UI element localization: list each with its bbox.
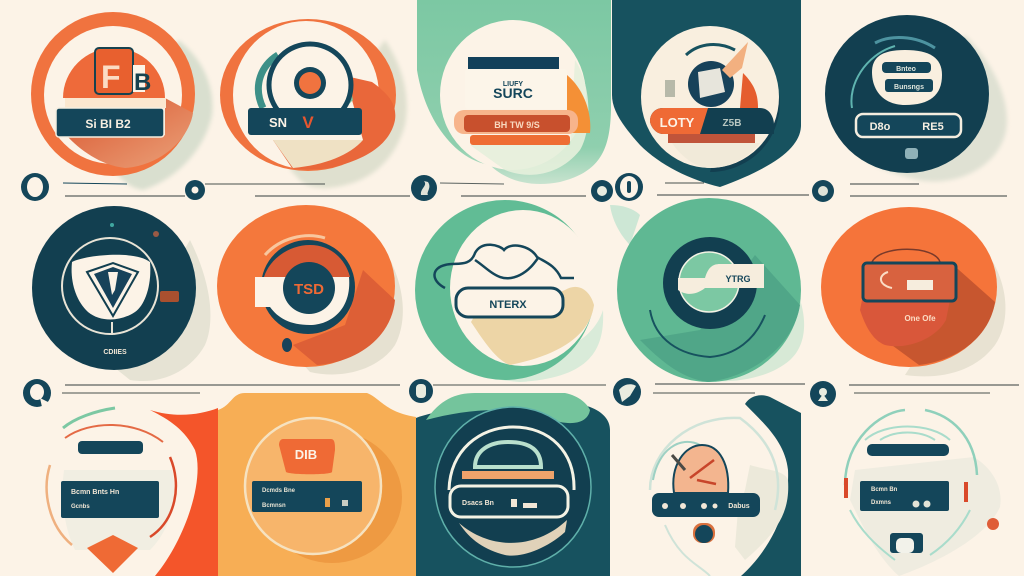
badge 12: amber with glass ring bbox=[245, 418, 402, 563]
icon: cream dome with pills bbox=[872, 50, 942, 105]
label bar: LOTY bbox=[660, 115, 695, 130]
label bar bbox=[454, 110, 578, 145]
node 1 bbox=[21, 173, 49, 201]
badge 13: navy appliance bbox=[435, 407, 591, 567]
label bar: Gcnbs bbox=[71, 504, 90, 510]
label bar: Si BI B2 bbox=[85, 117, 131, 131]
icon: shield bbox=[72, 255, 150, 335]
node 3 bbox=[411, 175, 437, 201]
label bar: RE5 bbox=[922, 121, 944, 133]
icon: cloud outline bbox=[434, 245, 574, 288]
icon: cream dome with pills: Bnteo bbox=[896, 66, 916, 73]
node 6 bbox=[812, 180, 834, 202]
label pill: YTRG bbox=[725, 274, 751, 284]
panel: bottom red backdrop bbox=[150, 408, 218, 576]
top pill bbox=[867, 444, 949, 456]
timeline 2 bbox=[23, 378, 1019, 407]
icon: small device bbox=[905, 148, 918, 159]
panel: bottom amber backdrop bbox=[218, 393, 416, 576]
panel: top green backdrop bbox=[417, 0, 611, 184]
label pill bbox=[456, 288, 563, 317]
badge 10: orange disc with card bbox=[821, 207, 1005, 376]
label bar: Z5B bbox=[723, 118, 741, 129]
badge 6: navy shield bbox=[32, 206, 210, 381]
icon: red tag bbox=[160, 291, 179, 302]
icon: dial bbox=[672, 445, 728, 493]
label pill bbox=[678, 264, 764, 294]
label bar: Dcmds Bne bbox=[262, 488, 296, 494]
small navy blob bbox=[282, 338, 292, 352]
node 2 bbox=[409, 379, 433, 403]
badge 2: orange ring with lens bbox=[220, 19, 407, 188]
icon: box with label: LIUFY bbox=[503, 81, 523, 88]
panel: bottom right navy backdrop bbox=[741, 395, 801, 576]
label bar bbox=[252, 481, 362, 512]
icon: box with label bbox=[465, 57, 590, 133]
label bar: Bcmn Bnts Hn bbox=[71, 489, 119, 496]
label bar bbox=[450, 486, 568, 517]
badge 4: cream circle on navy bbox=[641, 26, 780, 172]
label bar: Bcmnsn bbox=[262, 503, 286, 509]
label bar: V bbox=[302, 113, 314, 132]
icon: gem bbox=[87, 535, 138, 573]
icon: cream dome with pills: Bunsngs bbox=[894, 84, 924, 91]
badge 9: green disc with navy ring bbox=[610, 198, 804, 382]
label bar bbox=[860, 481, 949, 511]
orange tag bbox=[279, 439, 335, 474]
icon: small device bbox=[890, 533, 923, 553]
icon: ring and tag bbox=[255, 236, 355, 334]
badge 1: orange ring with card bbox=[31, 12, 213, 190]
label bar bbox=[61, 481, 159, 518]
badge 5: navy circle bbox=[825, 15, 1007, 181]
label bar: Dabus bbox=[728, 503, 750, 510]
label bar: SN bbox=[269, 115, 287, 130]
top pill bbox=[78, 441, 143, 454]
label bar: Bcmn Bn bbox=[871, 487, 898, 493]
icon: card symbol: F bbox=[101, 59, 121, 95]
icon: red dot bbox=[987, 518, 999, 530]
icon: box with label: SURC bbox=[493, 85, 533, 101]
orange tag: DIB bbox=[295, 447, 317, 462]
panel: bottom green accent bbox=[426, 393, 590, 423]
label pill: NTERX bbox=[489, 299, 527, 311]
label bar bbox=[56, 108, 164, 137]
icon: card bbox=[863, 263, 956, 301]
label bar: Dsacs Bn bbox=[462, 500, 494, 507]
caption: CDIIES bbox=[103, 349, 127, 356]
panel: bottom navy backdrop bbox=[416, 402, 610, 576]
icon: camera bbox=[693, 523, 715, 543]
badge 8: green ring with cream shape bbox=[415, 200, 603, 382]
panel: top navy backdrop bbox=[612, 0, 801, 187]
node 3 bbox=[613, 378, 641, 406]
badge 3: cream circle on green bbox=[440, 20, 590, 175]
node 4 bbox=[810, 381, 836, 407]
label bar bbox=[856, 114, 961, 137]
icon: card symbol: B bbox=[134, 69, 151, 96]
badge 7: orange lens bbox=[217, 205, 403, 374]
icon: globe and rocket bbox=[665, 42, 758, 108]
icon: lens bbox=[258, 44, 353, 126]
node 5 bbox=[615, 173, 643, 201]
label bar bbox=[248, 108, 362, 135]
label bar bbox=[652, 493, 760, 517]
label bar: BH TW 9/S bbox=[494, 120, 540, 130]
label bar: Dxmns bbox=[871, 500, 892, 506]
timeline 1 bbox=[21, 173, 1007, 202]
badge 11: cream with red gem bbox=[47, 408, 176, 573]
label bar: D8o bbox=[870, 121, 891, 133]
badge 14: dial and label bbox=[650, 418, 788, 576]
caption: One Ofe bbox=[904, 314, 936, 323]
icon: card symbol bbox=[95, 48, 151, 96]
badge 15: cream with green arcs bbox=[844, 410, 1001, 576]
node 4 bbox=[591, 180, 613, 202]
icon: ring and tag: TSD bbox=[294, 281, 324, 298]
node 2 bbox=[185, 180, 205, 200]
label bar bbox=[650, 108, 774, 143]
node 1 bbox=[23, 379, 51, 407]
